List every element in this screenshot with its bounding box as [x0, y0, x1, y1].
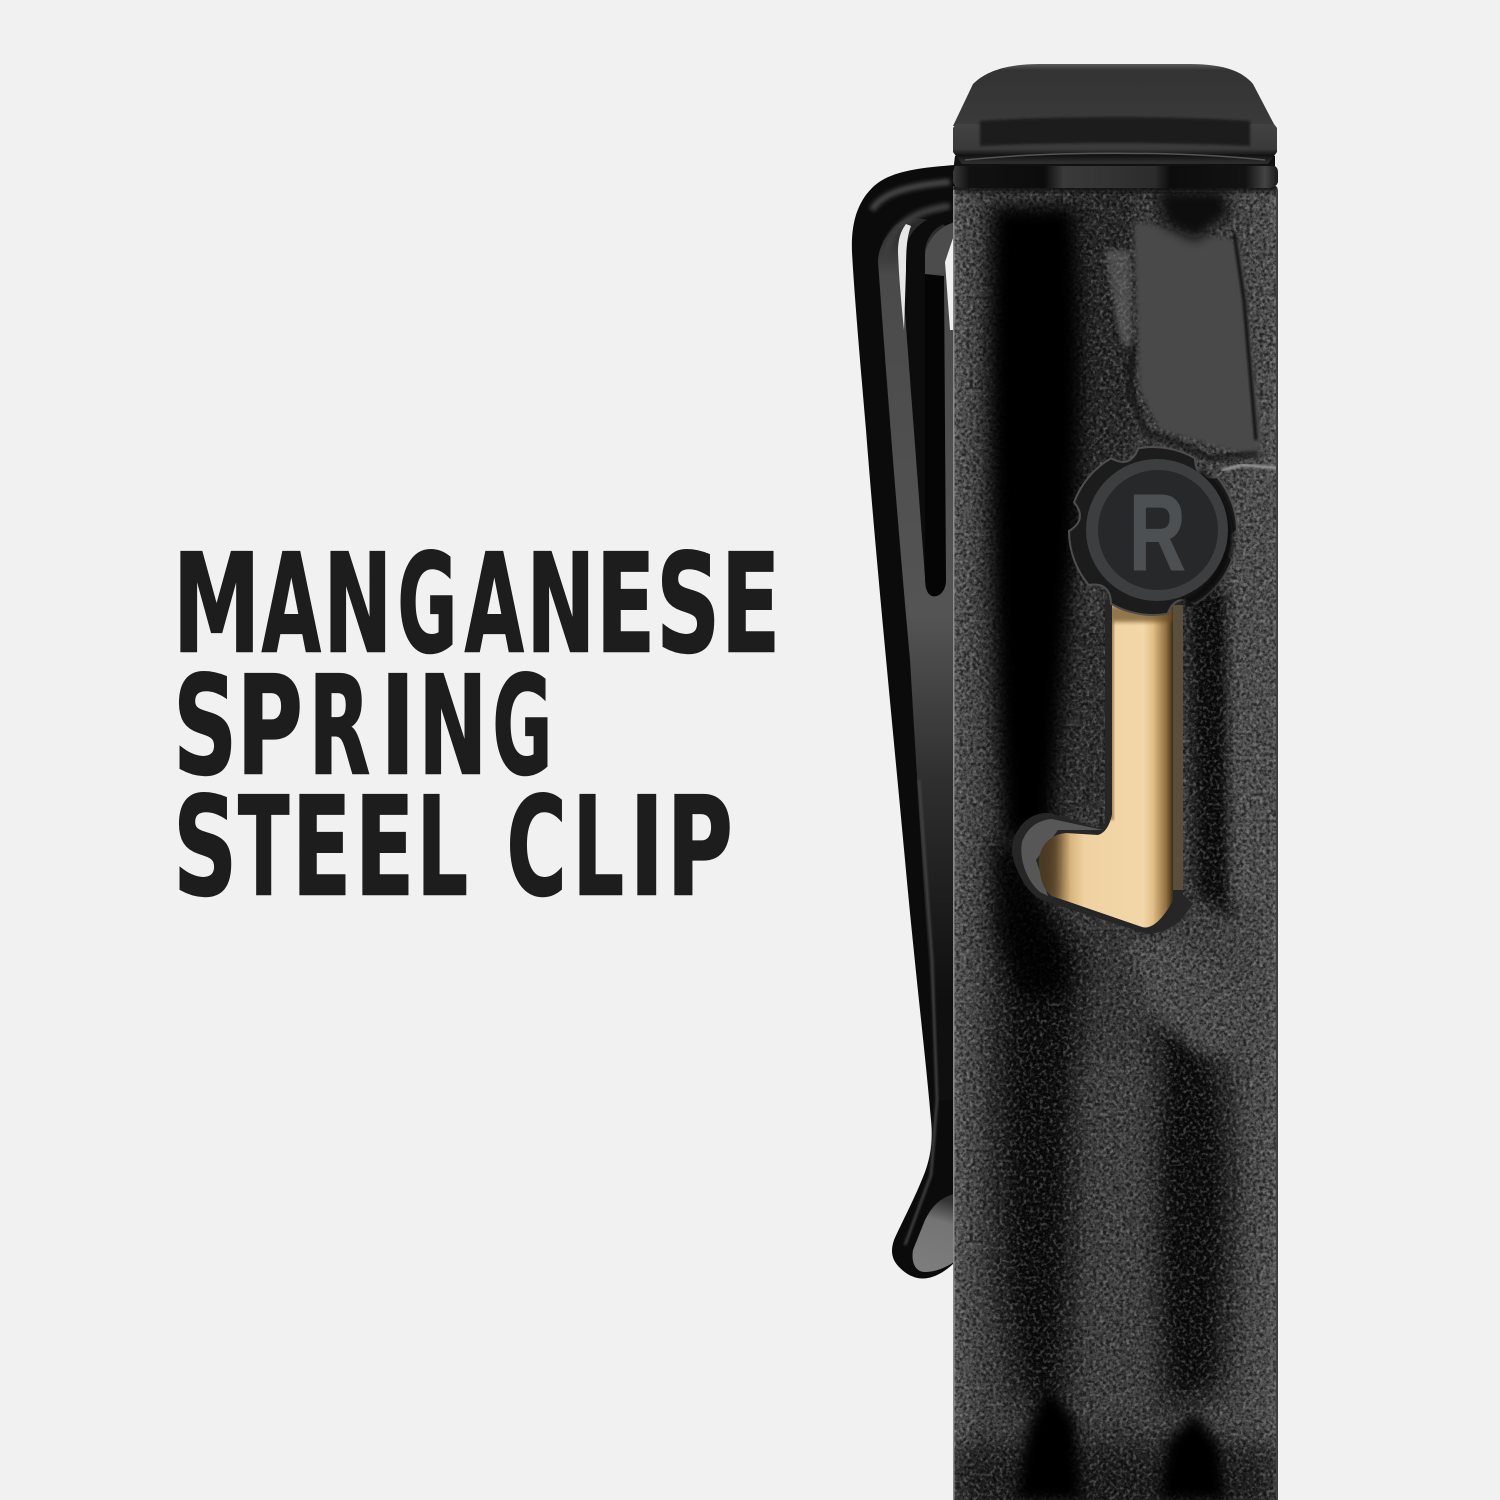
mid lighter zone: [1085, 1060, 1150, 1420]
R logo: R: [1129, 472, 1186, 594]
clip gap white: [945, 238, 953, 330]
pen clip: [852, 165, 955, 1279]
knob outer lobes: [1069, 447, 1237, 615]
dark zone right of knob: [1188, 590, 1232, 920]
heading: Manganese Spring Steel Clip: G: [492, 646, 552, 806]
slot recess outline: [1012, 600, 1193, 934]
right dark mass: [1152, 1015, 1232, 1410]
pen barrel: [953, 182, 1278, 1500]
slot bevel: [1021, 819, 1103, 896]
heading: Manganese Spring Steel Clip: C: [506, 767, 567, 927]
heading: Manganese Spring Steel Clip: N: [418, 646, 487, 806]
cap groove: [965, 153, 1265, 160]
white gap between prongs: [898, 224, 911, 330]
cap lower band: [953, 124, 1277, 164]
heading: Manganese Spring Steel Clip: I: [629, 768, 664, 927]
knob disc: [1098, 470, 1218, 590]
heading: Manganese Spring Steel Clip: A: [465, 526, 524, 685]
heading: Manganese Spring Steel Clip: N: [526, 524, 595, 684]
collar base: [953, 156, 1278, 188]
heading: Manganese Spring Steel Clip: G: [397, 524, 457, 684]
foot left shadow: [1039, 833, 1068, 900]
bottom black wedge right: [1158, 1412, 1226, 1500]
heading: Manganese Spring Steel Clip: M: [173, 525, 260, 685]
barrel top shadow: [953, 186, 1278, 194]
heading: Manganese Spring Steel Clip: E: [355, 768, 414, 928]
gold slot mechanism: [1012, 600, 1193, 934]
black continuation: [992, 840, 1070, 1000]
heading: Manganese Spring Steel Clip: S: [656, 526, 720, 685]
heading: Manganese Spring Steel Clip: P: [237, 647, 303, 807]
inner gray face: [925, 222, 955, 275]
heading: Manganese Spring Steel Clip: L: [572, 768, 624, 927]
barrel wear over grain: [989, 190, 1278, 1500]
heading: Manganese Spring Steel Clip: P: [667, 768, 733, 928]
barrel grain: [953, 185, 1278, 1500]
slot right gap: [1173, 605, 1183, 890]
barrel soft shading: [953, 190, 1278, 1500]
knob with R logo: [1069, 447, 1237, 615]
heading: Manganese Spring Steel Clip: [173, 524, 780, 928]
barrel base: [953, 185, 1278, 1500]
gold top shadow: [1108, 606, 1173, 622]
clip shoulder highlight: [885, 206, 950, 260]
upper flat patch: [1134, 222, 1262, 458]
heading: Manganese Spring Steel Clip: I: [380, 647, 415, 806]
collar gloss: [953, 166, 1278, 188]
pen cap: [953, 64, 1277, 164]
clip glossy highlight: [872, 182, 950, 210]
slot: [925, 274, 946, 596]
clip edge streak: [905, 780, 937, 1245]
clip tip face: [912, 1194, 954, 1272]
bottom shadow: [953, 1445, 1278, 1500]
patch cracks: [1234, 232, 1256, 440]
heading: Manganese Spring Steel Clip: E: [721, 525, 780, 685]
clip silhouette: [852, 165, 955, 1279]
cap upper bevel: [953, 64, 1275, 126]
heading: Manganese Spring Steel Clip: T: [238, 768, 289, 928]
heading: Manganese Spring Steel Clip: E: [596, 525, 655, 685]
flat patch below slot: [1127, 936, 1234, 1060]
heading: Manganese Spring Steel Clip: S: [173, 769, 237, 928]
gold left shadow: [1110, 620, 1114, 820]
knob shade: [1184, 474, 1228, 602]
dark zone beside column: [1076, 192, 1137, 484]
barrel edges: [953, 190, 954, 1500]
light zone right: [1226, 475, 1252, 902]
bottom black wedge left: [1015, 1385, 1082, 1500]
gold bolt: [1039, 600, 1173, 927]
top dark speckle: [1155, 190, 1230, 240]
clip side face: [878, 218, 955, 1100]
pen collar: [953, 156, 1278, 188]
heading: Manganese Spring Steel Clip: R: [309, 648, 370, 806]
cap dark band: [980, 117, 1250, 146]
gold shading: [1030, 606, 1173, 905]
inner prong: [903, 210, 955, 590]
light speckle band: [1105, 250, 1132, 350]
lower-left dark mass: [998, 830, 1085, 1410]
heading: Manganese Spring Steel Clip: L: [416, 768, 468, 927]
heading: Manganese Spring Steel Clip: A: [262, 526, 321, 685]
heading: Manganese Spring Steel Clip: E: [292, 768, 351, 928]
heading: Manganese Spring Steel Clip: S: [173, 648, 237, 807]
knob ring: [1086, 459, 1228, 601]
gray zone left of slot: [1060, 622, 1103, 818]
light scratch near knob: [1222, 465, 1278, 470]
black column upper: [989, 205, 1083, 845]
heading: Manganese Spring Steel Clip: N: [323, 524, 392, 684]
